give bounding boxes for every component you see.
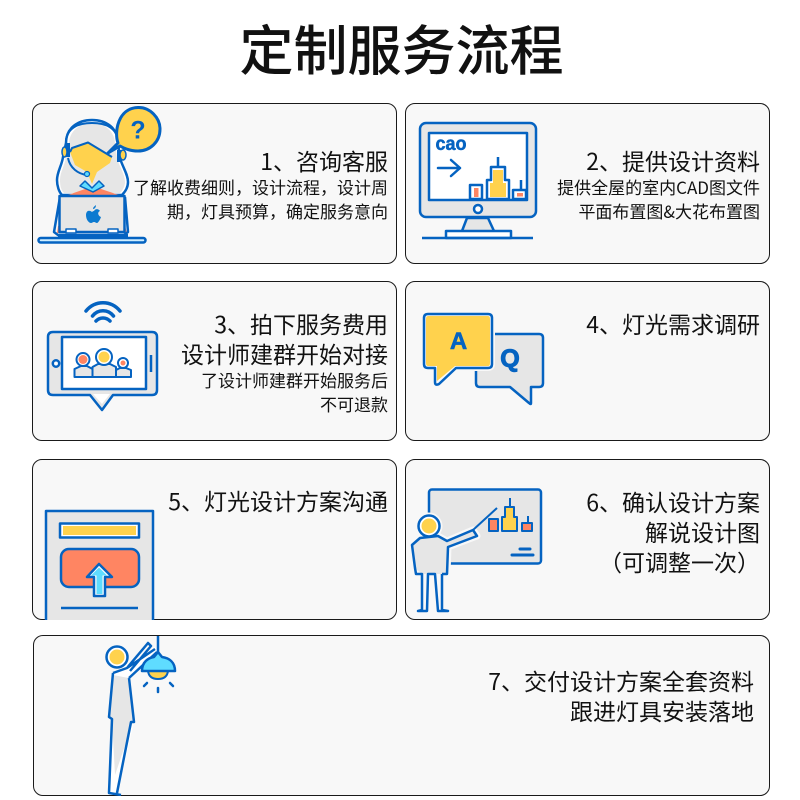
text: step 1 description: 了解收费细则，设计流程，设计周 (133, 174, 388, 199)
heading: step 3 (181, 306, 388, 370)
heading: step 6 (586, 484, 760, 578)
heading: step 2: 2、提供设计资料 (586, 143, 760, 177)
heading: step 6: 解说设计图 (645, 514, 760, 548)
panel: step 2 design data (405, 103, 770, 264)
icon: video group on phone (46, 301, 158, 412)
icon: person hanging lamp (105, 636, 176, 796)
text: step 2 description: 提供全屋的室内CAD图文件 (557, 174, 760, 199)
text: step 3 description: 不可退款 (320, 391, 388, 416)
text: step 1 description (133, 174, 388, 223)
heading: step 4: 4、灯光需求调研 (586, 306, 760, 340)
icon: Q and A speech bubbles: A (450, 328, 467, 355)
icon: Q and A speech bubbles (422, 312, 544, 406)
heading: step 7: 跟进灯具安装落地 (570, 693, 754, 727)
heading: step 1: 1、咨询客服 (260, 143, 388, 177)
apple logo (86, 205, 101, 223)
heading: step 5: 5、灯光设计方案沟通 (168, 483, 388, 517)
icon: customer service agent (37, 106, 162, 244)
heading: step 6: 6、确认设计方案 (586, 484, 760, 518)
heading: step 7: 7、交付设计方案全套资料 (488, 663, 754, 697)
panel: step 1 consult (32, 103, 397, 264)
icon: presenter at board (410, 488, 542, 612)
text: step 3 description (201, 367, 388, 416)
icon: customer service agent: ? (130, 116, 146, 144)
panel: step 3 payment (32, 281, 397, 441)
heading: step 6: （可调整一次） (599, 544, 760, 578)
icon: CAD monitor (418, 122, 538, 240)
panel: step 4 lighting research (405, 281, 770, 441)
text: step 2 description (557, 174, 760, 223)
text: step 2 description: 平面布置图&大花布置图 (578, 198, 760, 223)
panel: step 5 lighting plan (32, 459, 397, 620)
title: 定制服务流程 (240, 7, 564, 86)
heading: step 3: 设计师建群开始对接 (181, 336, 388, 370)
heading: step 7 (488, 663, 754, 727)
icon: CAD monitor: cao (436, 134, 466, 155)
icon: Q and A speech bubbles: Q (500, 345, 520, 373)
text: step 3 description: 了设计师建群开始服务后 (201, 367, 388, 392)
icon: upload document (44, 510, 154, 620)
panel: step 7 delivery (33, 635, 770, 796)
heading: step 3: 3、拍下服务费用 (214, 306, 388, 340)
text: step 1 description: 期，灯具预算，确定服务意向 (167, 198, 388, 223)
panel: step 6 confirm plan (405, 459, 770, 620)
